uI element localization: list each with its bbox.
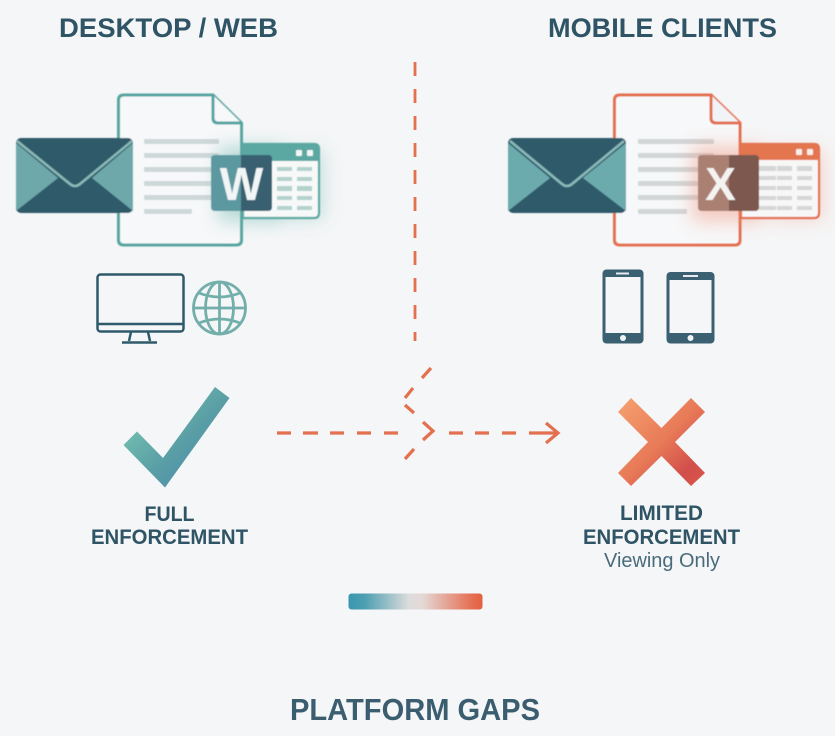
document xyxy=(118,95,242,245)
broken dashed arrow xyxy=(277,368,558,459)
crack mark xyxy=(405,368,433,459)
label: limited enforcement: LIMITED xyxy=(620,502,703,525)
gradient legend bar xyxy=(348,594,482,610)
icon: tablet xyxy=(666,272,714,344)
icon: smartphone xyxy=(602,270,644,344)
label: full enforcement: FULL xyxy=(144,503,195,526)
glow behind Excel tile xyxy=(692,146,764,222)
glow behind Word tile xyxy=(218,146,278,222)
label: full enforcement xyxy=(91,503,248,549)
spreadsheet window xyxy=(243,144,324,220)
envelope xyxy=(16,138,133,213)
label: limited enforcement xyxy=(583,502,740,572)
arrow head xyxy=(529,423,558,443)
dashed vertical divider xyxy=(414,62,416,341)
envelope xyxy=(508,138,626,213)
label: limited enforcement: ENFORCEMENT xyxy=(583,526,740,549)
icon: globe xyxy=(194,282,246,334)
document xyxy=(614,95,740,245)
footer title: PLATFORM GAPS xyxy=(290,692,540,727)
icon: cross mark xyxy=(618,398,705,486)
icon: desktop monitor xyxy=(98,274,184,342)
subtitle: Viewing Only xyxy=(604,550,720,572)
label: full enforcement: ENFORCEMENT xyxy=(91,526,248,549)
arrow dashes xyxy=(277,431,516,435)
icon group: mobile email, document and Excel file xyxy=(508,95,824,245)
Excel tile: X xyxy=(705,158,736,210)
Word tile xyxy=(211,155,272,211)
Excel tile xyxy=(698,155,759,211)
spreadsheet window xyxy=(741,144,824,220)
icon group: desktop email, document and Word file xyxy=(16,95,324,245)
icon: check mark xyxy=(124,387,230,488)
heading: mobile clients: MOBILE CLIENTS xyxy=(548,13,777,43)
heading: desktop / web: DESKTOP / WEB xyxy=(59,13,278,43)
Word tile: W xyxy=(220,158,264,210)
